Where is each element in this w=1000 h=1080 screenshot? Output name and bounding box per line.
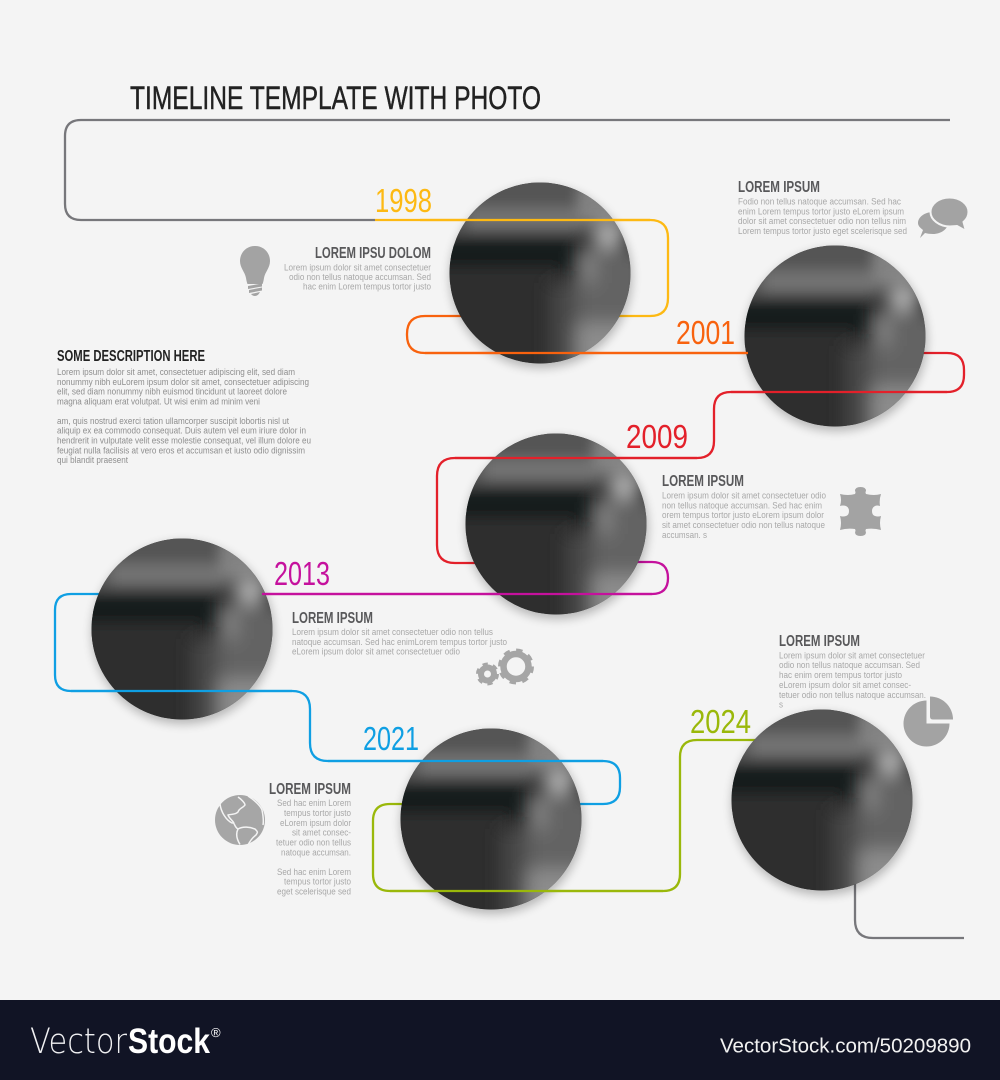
- icon: speech bubbles: [918, 198, 968, 238]
- text block: 2024 lorem ipsum: eLorem ipsum dolor sit amet consec-: [779, 680, 911, 690]
- text block: 2021 lorem ipsum: Sed hac enim Lorem: [277, 867, 351, 877]
- text block: 2013 lorem ipsum: Lorem ipsum dolor sit amet consectetuer odio non tellus: [292, 627, 493, 637]
- photo circle 2009: [446, 414, 666, 634]
- timeline line: blue: [55, 594, 620, 804]
- photo circle 2001: [725, 226, 945, 446]
- text block: lorem ipsu dolom: odio non tellus natoque accumsan. Sed: [289, 272, 431, 282]
- text block: 2009 lorem ipsum: sit amet consectetuer odio non tellus natoque: [662, 520, 825, 530]
- photo circle 2021: [381, 709, 601, 929]
- timeline line: yellow 1998: [375, 220, 668, 316]
- text block: 2001 lorem ipsum: LOREM IPSUM: [738, 179, 820, 196]
- text block: 2021 lorem ipsum: sit amet consec-: [292, 828, 351, 838]
- text block: lorem ipsu dolom: Lorem ipsum dolor sit amet consectetuer: [284, 262, 431, 272]
- text block: some description here: hendrerit in vulputate velit esse molestie consequat, vel illum dolore eu: [57, 436, 311, 446]
- photo circle 2013: [72, 519, 292, 739]
- timeline line: grey end: [855, 870, 964, 938]
- footer image id: VectorStock.com/50209890: [720, 1036, 971, 1058]
- title: TIMELINE TEMPLATE WITH PHOTO: [130, 80, 541, 116]
- text block: some description here: magna aliquam erat volutpat. Ut wisi enim ad minim veni: [57, 396, 260, 406]
- text block: some description here: SOME DESCRIPTION HERE: [57, 348, 205, 365]
- text block: 2009 lorem ipsum: orem tempus tortor justo eLorem ipsum dolor: [662, 510, 824, 520]
- text block: 2024 lorem ipsum: hac enim orem tempus tortor justo: [779, 670, 902, 680]
- text block: some description here: aliquip ex ea commodo consequat. Duis autem vel eum iriure dolor in: [57, 426, 306, 436]
- text block: 2001 lorem ipsum: [738, 179, 907, 236]
- footer bar: [0, 1000, 1000, 1080]
- year labels: 2021: [363, 720, 419, 757]
- timeline line: orange: [407, 316, 750, 353]
- text block: 2024 lorem ipsum: [779, 633, 926, 710]
- text block: some description here: elit, sed diam nonummy nibh euismod tincidunt ut laoreet dolore: [57, 387, 287, 397]
- icon: light bulb: [240, 246, 270, 296]
- text block: 2021 lorem ipsum: tempus tortor justo: [284, 877, 351, 887]
- text block: 2021 lorem ipsum: eget scelerisque sed: [277, 886, 351, 896]
- text block: 2021 lorem ipsum: [269, 781, 351, 896]
- text block: 2001 lorem ipsum: Fodio non tellus natoque accumsan. Sed hac: [738, 197, 901, 207]
- text block: 2021 lorem ipsum: tempus tortor justo: [284, 808, 351, 818]
- text block: 2021 lorem ipsum: Sed hac enim Lorem: [277, 798, 351, 808]
- timeline line: green: [373, 740, 770, 891]
- text block: 2001 lorem ipsum: enim Lorem tempus tortor justo eLorem ipsum: [738, 206, 904, 216]
- text block: 2021 lorem ipsum: eLorem ipsum dolor: [280, 818, 351, 828]
- text block: 2013 lorem ipsum: eLorem ipsum dolor sit amet consectetuer odio: [292, 647, 460, 657]
- text block: 2021 lorem ipsum: natoque accumsan.: [281, 848, 351, 858]
- timeline line: grey start: [65, 120, 950, 220]
- footer logo: ®: [211, 1025, 221, 1040]
- icon: gears: [478, 651, 532, 684]
- text block: 2024 lorem ipsum: s: [779, 700, 783, 710]
- text block: some description here: feugiat nulla facilisis at vero eros et accumsan et iusto odio dignissim: [57, 445, 305, 455]
- year labels: [274, 182, 751, 757]
- text block: 2021 lorem ipsum: LOREM IPSUM: [269, 781, 351, 798]
- icon: pie chart: [904, 696, 953, 746]
- timeline line: magenta: [260, 562, 668, 594]
- text block: 2021 lorem ipsum: tetuer odio non tellus: [276, 838, 351, 848]
- text block: 2013 lorem ipsum: LOREM IPSUM: [292, 610, 373, 627]
- text block: lorem ipsu dolom: [284, 245, 431, 292]
- text block: 2024 lorem ipsum: odio non tellus natoque accumsan. Sed: [779, 660, 920, 670]
- icon: globe: [215, 795, 265, 845]
- text block: 2024 lorem ipsum: LOREM IPSUM: [779, 633, 860, 650]
- text block: some description here: am, quis nostrud exerci tation ullamcorper suscipit lobortis nisl ut: [57, 416, 289, 426]
- text block: 2024 lorem ipsum: Lorem ipsum dolor sit amet consectetuer: [779, 650, 925, 660]
- photo circle 2024: [712, 690, 932, 910]
- text block: 2001 lorem ipsum: Lorem tempus tortor justo eget scelerisque sed: [738, 226, 907, 236]
- text block: 2013 lorem ipsum: [292, 610, 507, 657]
- year labels: 2024: [690, 703, 751, 740]
- text block: 2009 lorem ipsum: Lorem ipsum dolor sit amet consectetuer odio: [662, 491, 826, 501]
- footer logo: [30, 1022, 221, 1062]
- footer logo: Stock: [128, 1022, 210, 1061]
- text block: 2024 lorem ipsum: tetuer odio non tellus natoque accumsan.: [779, 690, 926, 700]
- year labels: 2001: [676, 314, 735, 351]
- text block: lorem ipsu dolom: LOREM IPSU DOLOM: [315, 245, 431, 262]
- photo circle 1998: [430, 163, 650, 383]
- text block: lorem ipsu dolom: hac enim Lorem tempus tortor justo: [303, 282, 431, 292]
- text block: some description here: nonummy nibh euLorem ipsum dolor sit amet, consectetuer adipiscing: [57, 377, 309, 387]
- year labels: 1998: [375, 182, 432, 219]
- text block: some description here: qui blandit praesent: [57, 455, 128, 465]
- footer logo: Vector: [30, 1022, 128, 1062]
- text block: 2001 lorem ipsum: dolor sit amet consectetuer odio non tellus nim: [738, 216, 906, 226]
- lines crossing over photos: [71, 220, 947, 891]
- text block: 2009 lorem ipsum: accumsan. s: [662, 530, 707, 540]
- year labels: 2009: [626, 418, 688, 455]
- text block: 2009 lorem ipsum: LOREM IPSUM: [662, 473, 744, 490]
- icon: puzzle piece: [840, 487, 881, 536]
- text block: some description here: [57, 348, 311, 465]
- text block: some description here: Lorem ipsum dolor sit amet, consectetuer adipiscing elit, sed diam: [57, 367, 295, 377]
- text block: 2013 lorem ipsum: natoque accumsan. Sed hac enimLorem tempus tortor justo: [292, 637, 507, 647]
- text block: 2009 lorem ipsum: non tellus natoque accumsan. Sed hac enim: [662, 500, 822, 510]
- timeline line: red: [437, 353, 964, 563]
- year labels: 2013: [274, 555, 330, 592]
- text block: 2009 lorem ipsum: [662, 473, 826, 540]
